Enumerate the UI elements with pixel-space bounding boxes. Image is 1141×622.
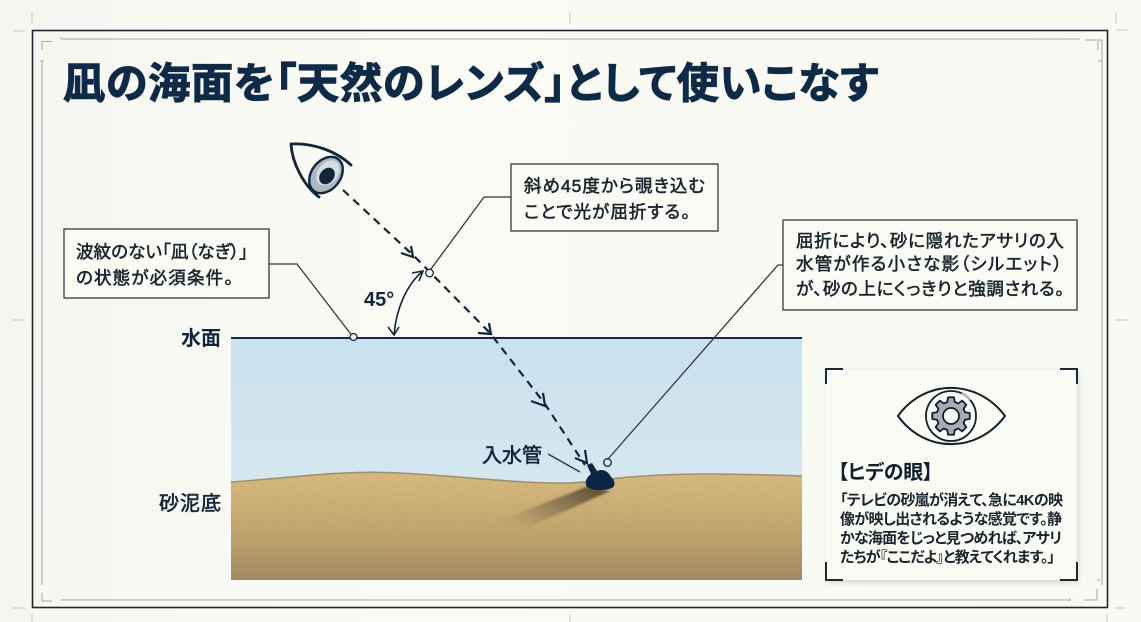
callout: siphon silhouette: が、砂の上にくっきりと強調される。: [796, 279, 1064, 299]
label: water surface: 水面: [181, 327, 221, 350]
callout: siphon silhouette: 水管が作る小さな影（シルエット）: [796, 254, 1062, 274]
callout: look in at 45 degrees: ことで光が屈折する。: [524, 202, 690, 222]
icon: clam siphon: [586, 463, 615, 490]
icon: viewing eye: [291, 144, 351, 200]
panel: Hide's eye: 「テレビの砂嵐が消えて、急に4Kの映: [840, 491, 1063, 509]
icon: eye with gear: [898, 388, 1005, 444]
title: 凪の海面を「天然のレンズ」として使いこなす: [63, 60, 878, 107]
label: sandy mud bottom: 砂泥底: [159, 492, 221, 515]
label: siphon: [482, 444, 580, 472]
water surface line: [231, 337, 802, 339]
panel: Hide's eye: かな海面をじっと見つめれば、アサリ: [840, 530, 1062, 547]
callout: calm condition: の状態が必須条件。: [76, 268, 233, 288]
callout: siphon silhouette: 屈折により、砂に隠れたアサリの入: [796, 231, 1064, 251]
callout: calm condition: 波紋のない「凪（なぎ）」: [76, 242, 248, 262]
arrow: dashed line of sight: [343, 190, 587, 465]
callout: siphon silhouette: [604, 220, 1077, 466]
angle marker: 45 degrees: [364, 271, 423, 335]
panel: Hide's eye: たちが『ここだよ』と教えてくれます。」: [840, 548, 1055, 566]
label: siphon: 入水管: [482, 444, 542, 467]
callout: look in at 45 degrees: [426, 164, 718, 277]
panel: Hide's eye: 【ヒデの眼】: [838, 460, 933, 484]
panel: Hide's eye: [826, 369, 1078, 582]
callout: calm condition: [64, 229, 357, 340]
water layer: [231, 338, 802, 488]
panel: Hide's eye: 像が映し出されるような感覚です。静: [840, 510, 1062, 528]
burrow shadow: [476, 487, 610, 530]
angle marker: 45 degrees: 45°: [364, 289, 394, 311]
callout: look in at 45 degrees: 斜め45度から覗き込む: [524, 176, 705, 196]
sand seabed: [231, 470, 802, 580]
